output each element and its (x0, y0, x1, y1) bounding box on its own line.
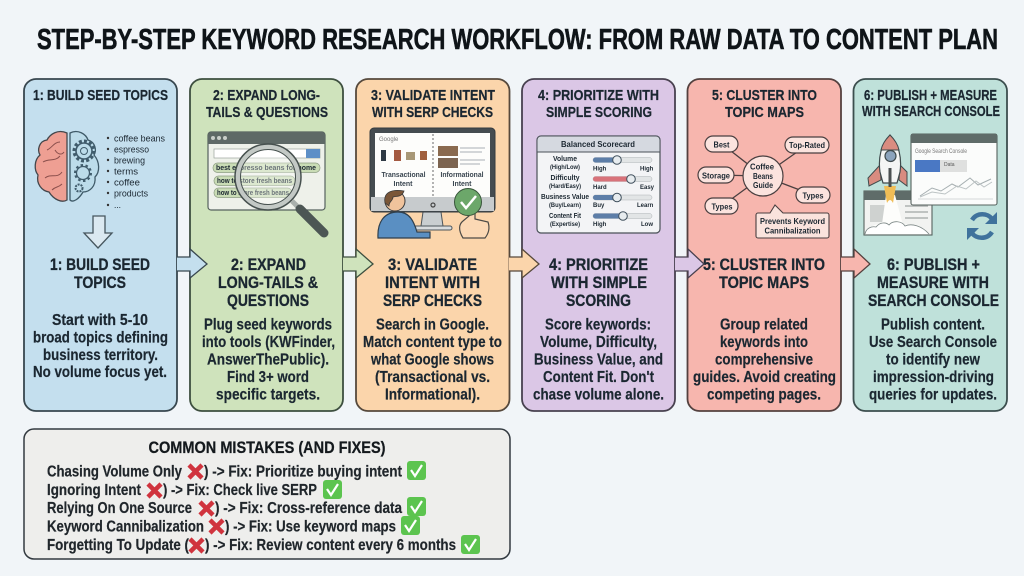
mistake 4: Keyword Cannibalization (47, 518, 204, 536)
balanced scorecard: Volume (553, 154, 577, 163)
step 2 description: Plug seed keywords (204, 316, 332, 334)
step 5 top heading: TOPIC MAPS (725, 104, 804, 121)
slider rows: Buy (593, 203, 605, 209)
step 3 top heading: WITH SERP CHECKS (372, 104, 493, 121)
step 3 description (363, 316, 502, 404)
icon: refresh arrows (967, 212, 997, 240)
icon: rocket launch (865, 135, 929, 234)
slider rows (593, 156, 655, 228)
step 6 heading: MEASURE WITH (877, 274, 989, 292)
slider rows: High (593, 222, 607, 228)
seed keyword list: brewing (114, 156, 145, 166)
topic map diagram: Beans (753, 171, 773, 181)
step 2 heading: LONG-TAILS & (218, 274, 318, 292)
balanced scorecard: Balanced Scorecard (561, 139, 635, 149)
icon: brain with gears (35, 132, 99, 201)
seed keyword list: ... (114, 200, 121, 211)
step 3 top heading: 3: VALIDATE INTENT (371, 87, 495, 104)
mistake 1: ) -> Fix: Prioritize buying intent (204, 464, 402, 480)
step 5 description: comprehensive (715, 352, 813, 368)
seed keyword list (107, 134, 165, 211)
panel: step 6 publish and measure (854, 79, 1007, 411)
topic map diagram: Top-Rated (789, 140, 825, 150)
callout: prevents keyword cannibalization: Cannibalization (764, 226, 821, 236)
monitor with SERP comparison: Google (379, 137, 399, 143)
seed keyword list: coffee beans (114, 134, 165, 144)
browser with search suggestions: best espresso beans for home (216, 165, 316, 172)
step 5 top heading (712, 87, 817, 121)
step 6 heading: 6: PUBLISH + (887, 256, 980, 274)
step 3 description: (Transactional vs. (375, 369, 490, 386)
topic map diagram: Coffee (750, 162, 774, 172)
step 2 description: specific targets. (216, 386, 320, 404)
step 4 description: Content Fit. Don't (543, 369, 654, 386)
step 2 description (202, 316, 335, 404)
step 6 description: impression-driving (873, 369, 994, 386)
topic map diagram (698, 136, 830, 214)
panel: step 5 cluster (688, 79, 841, 411)
step 6 description (869, 316, 997, 404)
step 5 description: guides. Avoid creating (693, 369, 836, 386)
mistake 4 (47, 516, 420, 536)
arrow: seed topics down (84, 216, 112, 248)
mistakes heading: COMMON MISTAKES (AND FIXES) (148, 438, 386, 457)
step 4 top heading: 4: PRIORITIZE WITH (538, 87, 659, 104)
step 3 top heading (371, 87, 495, 121)
panel: step 4 prioritize (522, 79, 675, 411)
seed keyword list: products (114, 188, 148, 200)
icon: check and pointing hand (454, 188, 489, 238)
step 6 description: to identify new (886, 352, 981, 368)
seed keyword list: espresso (114, 144, 149, 156)
mistake 5: Forgetting To Update ( (47, 537, 190, 554)
step 4 top heading (538, 87, 659, 121)
topic map diagram: Types (712, 202, 733, 212)
arrow: step 3 to 4 (509, 249, 539, 278)
step 6 description: Publish content. (881, 316, 985, 334)
step 4 heading: SCORING (566, 292, 631, 310)
step 5 description: keywords into (720, 334, 808, 351)
step 1 description: broad topics defining (33, 330, 168, 346)
balanced scorecard: (Hard/Easy) (549, 184, 581, 190)
panel: step 1 build seed topics (24, 79, 177, 411)
monitor with SERP comparison: Intent (452, 179, 472, 188)
topic map diagram: Types (802, 190, 824, 200)
seed keyword list: terms (114, 166, 138, 178)
search console window: Data (944, 162, 955, 168)
step 6 description: Use Search Console (869, 334, 997, 351)
step 3 heading: 3: VALIDATE (388, 256, 477, 274)
step 1 top heading: 1: BUILD SEED TOPICS (33, 87, 168, 104)
slider rows: High (640, 166, 654, 172)
monitor with SERP comparison: Intent (394, 179, 413, 188)
step 3 description: Informational). (385, 386, 480, 404)
step 5 description: competing pages. (707, 386, 821, 404)
callout: prevents keyword cannibalization (756, 205, 829, 238)
step 4 heading: 4: PRIORITIZE (549, 256, 648, 274)
mistake 4: ) -> Fix: Use keyword maps (225, 518, 396, 536)
slider rows: Hard (593, 185, 607, 191)
step 6 heading (868, 256, 999, 310)
step 6 description: queries for updates. (869, 386, 997, 404)
balanced scorecard: Content Fit (549, 211, 581, 220)
step 3 description: what Google shows (370, 352, 494, 368)
slider rows: High (593, 166, 607, 172)
mistake 5 (47, 535, 480, 554)
topic map diagram: Storage (702, 170, 730, 180)
panel: step 3 validate intent (356, 79, 510, 411)
step 3 description: Search in Google. (376, 316, 489, 334)
step 2 heading: 2: EXPAND (231, 256, 306, 274)
step 2 top heading: 2: EXPAND LONG- (213, 87, 320, 104)
step 5 heading (703, 256, 825, 292)
step 2 heading (218, 256, 318, 310)
monitor with SERP comparison (370, 128, 495, 230)
step 4 heading: WITH SIMPLE (551, 274, 647, 292)
browser with search suggestions: how to store fresh beans (217, 178, 292, 185)
arrow: step 5 to 6 (841, 249, 870, 278)
step 1 description (33, 312, 168, 381)
balanced scorecard: Business Value (541, 192, 589, 201)
published page window (864, 191, 932, 235)
balanced scorecard: (High/Low) (550, 165, 580, 171)
step 3 heading: INTENT WITH (385, 274, 480, 292)
arrow: step 2 to 3 (343, 249, 373, 278)
step 5 heading: 5: CLUSTER INTO (703, 256, 825, 274)
slider rows: Easy (640, 185, 655, 191)
mistake 3 (47, 497, 426, 517)
mistake 3: ) -> Fix: Cross-reference data (215, 500, 402, 517)
panel: common mistakes and fixes (24, 429, 510, 559)
topic map diagram: Best (714, 140, 730, 150)
mistake 2 (47, 480, 342, 499)
step 4 heading (549, 256, 648, 310)
step 1 heading: 1: BUILD SEED (50, 256, 150, 274)
step 3 description: Match content type to (363, 334, 502, 351)
step 1 description: Start with 5-10 (52, 312, 148, 329)
browser with search suggestions (208, 132, 325, 210)
step 4 description (533, 316, 664, 404)
mistake 2: Ignoring Intent (47, 482, 141, 499)
step 3 heading: SERP CHECKS (383, 292, 482, 310)
step 1 description: No volume focus yet. (33, 364, 167, 381)
step 2 top heading: TAILS & QUESTIONS (206, 104, 328, 121)
slider rows: Low (641, 222, 653, 228)
mistake 2: ) -> Fix: Check live SERP (163, 482, 317, 499)
step 4 description: Volume, Difficulty, (540, 334, 657, 351)
balanced scorecard: (Expertise) (550, 222, 580, 228)
mistake 1: Chasing Volume Only (47, 464, 182, 480)
seed keyword list: coffee (114, 178, 140, 188)
step 2 description: into tools (KWFinder, (202, 334, 335, 351)
arrow: step 4 to 5 (675, 249, 704, 278)
browser with search suggestions: how to store fresh beans (217, 190, 289, 197)
step 4 top heading: SIMPLE SCORING (546, 104, 652, 121)
step 5 heading: TOPIC MAPS (719, 274, 809, 292)
step 4 description: Business Value, and (534, 352, 663, 368)
topic map diagram: Guide (753, 180, 773, 190)
step 2 heading: QUESTIONS (227, 292, 309, 310)
step 2 description: Find 3+ word (227, 369, 309, 386)
arrow: step 1 to 2 (177, 249, 207, 278)
step 5 description (693, 316, 836, 404)
mistake 5: ) -> Fix: Review content every 6 months (205, 537, 456, 554)
step 2 description: AnswerThePublic). (207, 352, 329, 368)
search console window: Google Search Console (915, 149, 968, 155)
panel: step 2 expand long-tails (190, 79, 343, 411)
step 1 description: business territory. (43, 347, 158, 364)
balanced scorecard: (Buy/Learn) (549, 203, 581, 209)
callout: prevents keyword cannibalization: Prevents Keyword (760, 217, 825, 226)
step 3 heading (383, 256, 482, 310)
step 4 description: chase volume alone. (533, 386, 664, 404)
balanced scorecard (537, 136, 660, 233)
step 5 description: Group related (720, 316, 808, 334)
step 2 top heading (206, 87, 328, 121)
mistake 1 (47, 461, 426, 480)
step 1 heading: TOPICS (74, 274, 126, 292)
icon: magnifying glass (235, 144, 324, 233)
balanced scorecard: Difficulty (550, 173, 580, 182)
step 1 heading (50, 256, 150, 292)
step 4 description: Score keywords: (545, 316, 651, 334)
search console window (911, 134, 997, 205)
slider rows: Learn (637, 203, 654, 209)
step 6 heading: SEARCH CONSOLE (868, 292, 999, 310)
monitor with SERP comparison: Informational (440, 170, 484, 179)
monitor with SERP comparison: Transactional (382, 170, 426, 179)
mistake 3: Relying On One Source (47, 500, 192, 517)
step 6 top heading (862, 87, 1000, 120)
icon: person at computer (378, 190, 430, 238)
step 5 top heading: 5: CLUSTER INTO (712, 87, 817, 104)
